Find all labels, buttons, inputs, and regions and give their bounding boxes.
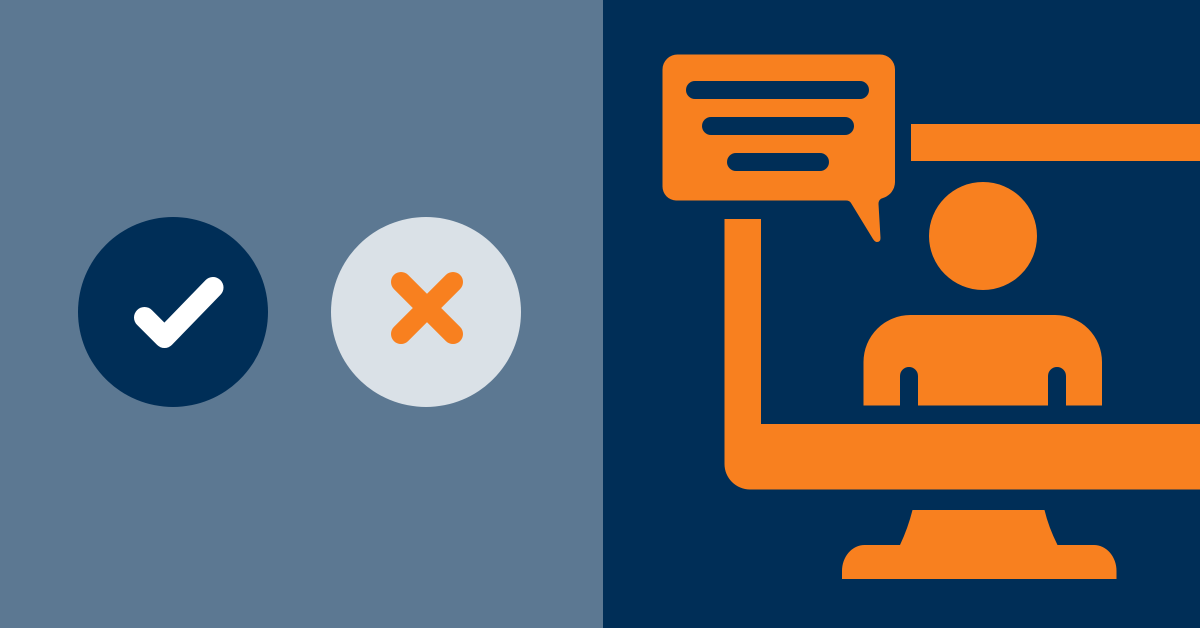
panel: left background <box>0 0 603 628</box>
icon: monitor top edge <box>911 124 1200 161</box>
icon: monitor frame <box>724 219 1200 490</box>
icon: check mark circle <box>78 217 268 407</box>
icon: monitor stand <box>842 510 1116 579</box>
icon: person <box>864 182 1102 406</box>
icon: cross circle <box>331 217 521 407</box>
panel: right background <box>603 0 1200 628</box>
icon: speech bubble <box>662 54 895 242</box>
